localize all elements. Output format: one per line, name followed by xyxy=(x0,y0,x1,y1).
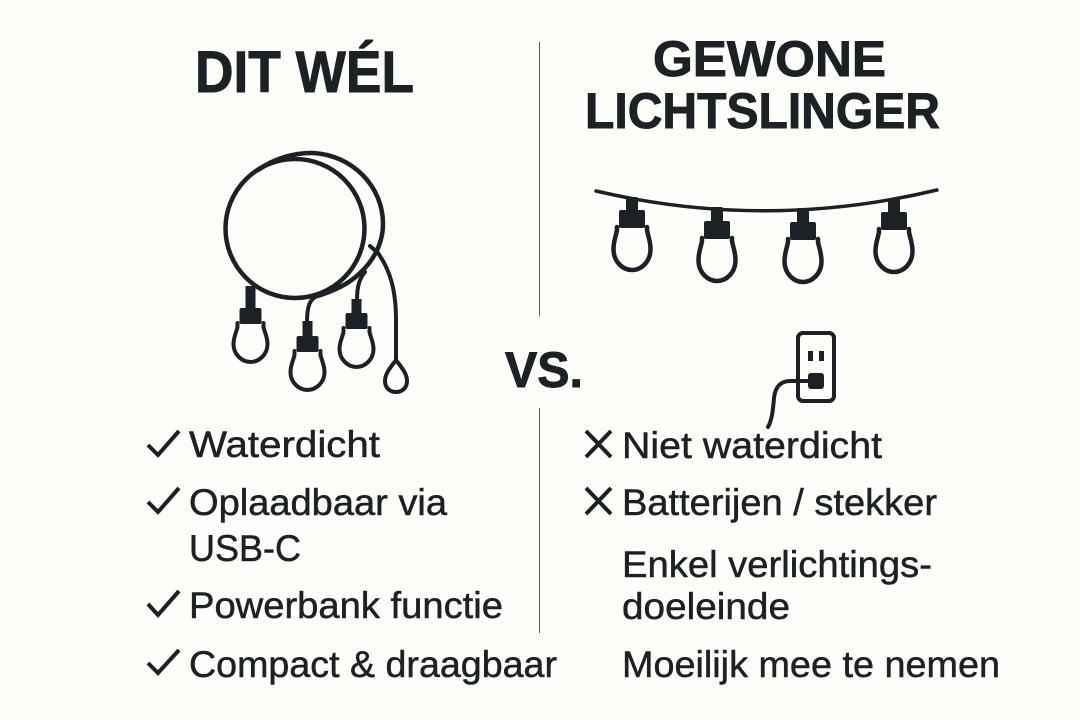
item: Oplaadbaar via USB-C: USB-C xyxy=(189,528,301,569)
bulb 2 xyxy=(698,207,736,281)
icon: ordinary string lights xyxy=(596,190,937,282)
item: Oplaadbaar via USB-C xyxy=(148,482,447,569)
bulb 3 xyxy=(784,208,822,282)
item: Niet waterdicht: Niet waterdicht xyxy=(622,425,883,466)
item: Enkel verlichtingsdoeleinde xyxy=(622,544,932,627)
item: Batterijen / stekker: Batterijen / stekker xyxy=(622,482,937,523)
item: Enkel verlichtingsdoeleinde: Enkel verlichtings- xyxy=(622,544,932,585)
heading: Gewone lichtslinger xyxy=(585,31,940,139)
heading: Gewone lichtslinger: GEWONE xyxy=(653,31,886,87)
item: Oplaadbaar via USB-C: Oplaadbaar via xyxy=(189,482,447,523)
list: Dit wél benefits xyxy=(148,424,557,685)
bulb 2 xyxy=(290,321,324,390)
item: Powerbank functie: Powerbank functie xyxy=(189,585,503,626)
bulb 3 xyxy=(340,299,374,367)
bulb 4 xyxy=(876,198,912,272)
bulb 1 xyxy=(614,197,650,270)
item: Waterdicht: Waterdicht xyxy=(189,424,381,465)
icon: wall outlet with plug xyxy=(768,333,834,427)
heading: Gewone lichtslinger: LICHTSLINGER xyxy=(585,83,940,139)
icon: coiled rechargeable light string xyxy=(226,153,407,392)
item: Enkel verlichtingsdoeleinde: doeleinde xyxy=(622,586,790,627)
heading: Dit wél: DIT WÉL xyxy=(195,40,414,105)
item: Compact & draagbaar: Compact & draagbaar xyxy=(189,644,557,685)
list: gewone lichtslinger drawbacks xyxy=(586,425,1000,685)
item: Moeilijk mee te nemen: Moeilijk mee te nemen xyxy=(622,644,1000,685)
label: VS.: VS. xyxy=(505,342,583,398)
bulb 1 xyxy=(234,286,268,362)
